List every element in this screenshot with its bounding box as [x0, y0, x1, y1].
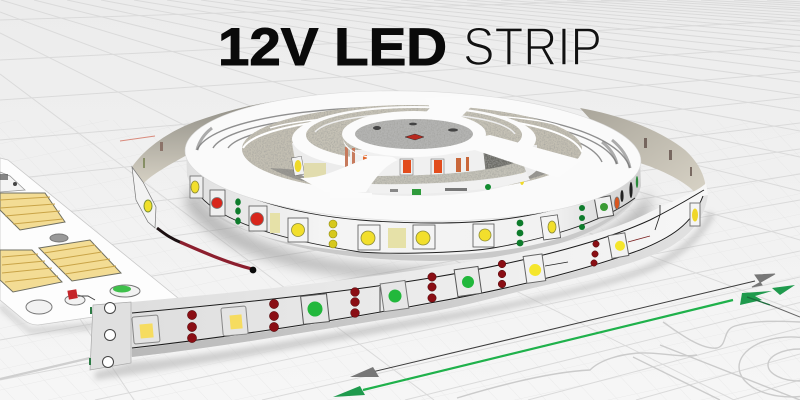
hub center mark	[405, 134, 424, 140]
coil top white surface	[183, 85, 643, 227]
strip upper black line	[132, 190, 704, 313]
reel top spoke	[422, 95, 472, 120]
clip holes	[102, 302, 116, 368]
second ring inner wall	[306, 108, 522, 162]
panel: left circuit board	[0, 158, 178, 334]
tail marks left	[143, 142, 163, 168]
LED 7 yellow	[608, 233, 629, 258]
reel right spoke	[452, 135, 582, 178]
wire tip	[250, 267, 256, 273]
large inner opening	[242, 105, 582, 193]
green solder pad	[113, 286, 131, 292]
opening back ring stripes	[243, 114, 582, 152]
hub white ring	[342, 111, 486, 157]
hub gray disc	[355, 119, 473, 149]
title light part: STRIP	[463, 17, 602, 77]
red LED group	[210, 190, 620, 231]
black wire segment	[157, 228, 182, 243]
panel: coiled LED strip	[183, 85, 643, 261]
title	[218, 17, 602, 77]
tail end LED	[144, 200, 152, 212]
inner wall groove	[315, 114, 515, 134]
second ring pad dots	[304, 163, 326, 179]
LED 1	[132, 315, 160, 344]
strip trace segments	[380, 205, 660, 312]
dark dots	[620, 176, 638, 202]
coil grooves	[197, 107, 630, 168]
dense pad dots	[270, 213, 406, 248]
connector wire	[78, 296, 95, 300]
coil strip lines	[194, 165, 635, 253]
gold pad stripes	[0, 197, 116, 282]
green arrow left head	[333, 386, 365, 397]
strip lower black line	[132, 196, 703, 348]
back of tail right	[580, 108, 706, 195]
panel: front LED strip	[89, 183, 708, 370]
end clip	[89, 302, 131, 370]
second ring white rim	[292, 106, 536, 172]
red axis line	[120, 136, 155, 141]
tail marks right	[644, 138, 692, 176]
small top board details	[0, 172, 25, 192]
gray arrow shaft	[372, 281, 755, 372]
strip band body	[93, 183, 708, 357]
green arrow shaft	[363, 300, 733, 390]
title bold part: 12V LED	[218, 18, 447, 77]
inner white strip segment	[368, 172, 530, 194]
inner wall front hole	[350, 150, 500, 176]
strip lower bevel	[132, 195, 708, 357]
faint traced circuit curves on floor	[457, 321, 800, 400]
coil LEDs	[190, 176, 638, 250]
LED 5 green	[454, 266, 482, 297]
opening lower dark area	[270, 162, 575, 193]
dark green crossing line	[747, 297, 770, 305]
arrow: green dimension line	[333, 285, 800, 397]
red connector	[67, 289, 78, 300]
LED 8 yellow	[690, 203, 700, 226]
coil side band	[186, 146, 641, 261]
panel: back tail of strip left	[132, 94, 340, 228]
green arrow right head	[772, 285, 795, 295]
clip plate	[90, 302, 131, 370]
arrow: gray dimension line	[350, 274, 775, 377]
coil bottom bevel	[190, 184, 638, 261]
groove side shading	[197, 128, 630, 168]
LED 6 yellow	[523, 254, 546, 283]
green dots	[235, 198, 585, 246]
strip shadow on floor	[95, 212, 715, 380]
yellow LED group	[190, 176, 561, 250]
white LED squares	[132, 203, 700, 344]
fine floor grid	[0, 120, 800, 400]
reel lower fill	[330, 186, 372, 198]
tail end left	[132, 167, 156, 228]
clip green tabs	[89, 307, 92, 365]
yellow dots	[329, 220, 337, 248]
reel left spoke	[300, 140, 398, 192]
LED 2	[221, 306, 248, 336]
green LED	[594, 196, 614, 218]
gray arrow right head	[752, 274, 775, 287]
board shadow	[0, 302, 100, 334]
coil floor shadow	[185, 185, 650, 280]
back of tail left	[132, 94, 340, 184]
second ring LED	[292, 156, 304, 176]
board body	[0, 158, 178, 325]
board circular pads	[26, 234, 140, 314]
red dot triplets	[187, 241, 599, 343]
hub side LEDs	[345, 147, 469, 175]
hub disc marks	[373, 123, 458, 132]
panel: back tail of strip right	[580, 108, 706, 195]
LED 3 green	[301, 294, 329, 324]
LED 4 green	[380, 280, 409, 312]
second ring side band	[292, 143, 537, 196]
gray arrow left head	[350, 367, 379, 377]
red wire segment	[180, 242, 252, 269]
green arrow right notch head	[740, 291, 772, 305]
gold pads	[0, 193, 121, 292]
second ring right LED	[520, 171, 524, 185]
connecting wire	[157, 228, 256, 273]
inner coil dark gap	[483, 148, 520, 175]
noisy inner band	[370, 160, 526, 184]
thin lead wire from clip	[0, 358, 90, 379]
dark gray continuation	[770, 305, 800, 317]
inner strip small LEDs	[390, 184, 491, 195]
